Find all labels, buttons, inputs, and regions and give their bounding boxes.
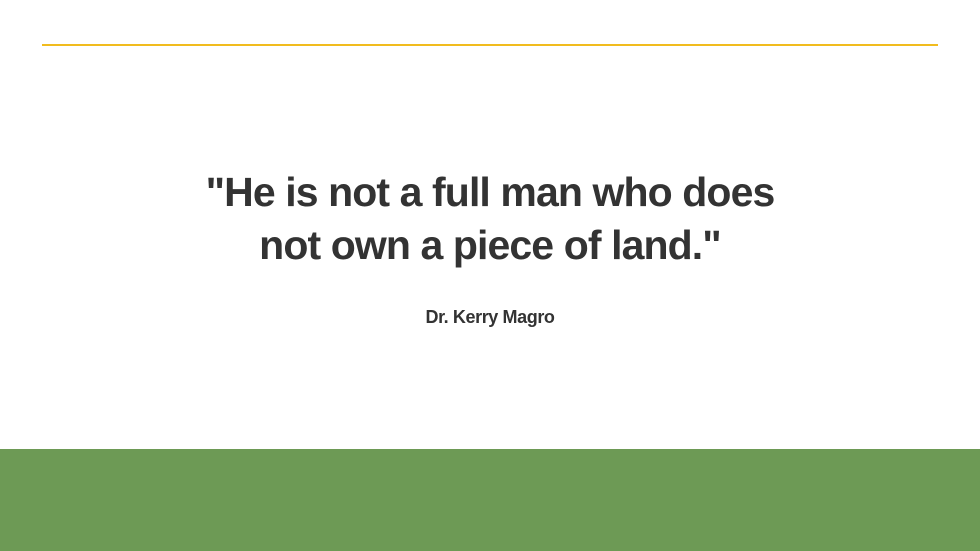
attribution: Dr. Kerry Magro <box>425 307 555 327</box>
quote heading: "He is not a full man who does <box>206 169 774 215</box>
quote heading <box>206 169 774 268</box>
quote heading: not own a piece of land." <box>259 222 721 268</box>
top yellow rule <box>42 44 938 46</box>
green footer band <box>0 449 980 551</box>
